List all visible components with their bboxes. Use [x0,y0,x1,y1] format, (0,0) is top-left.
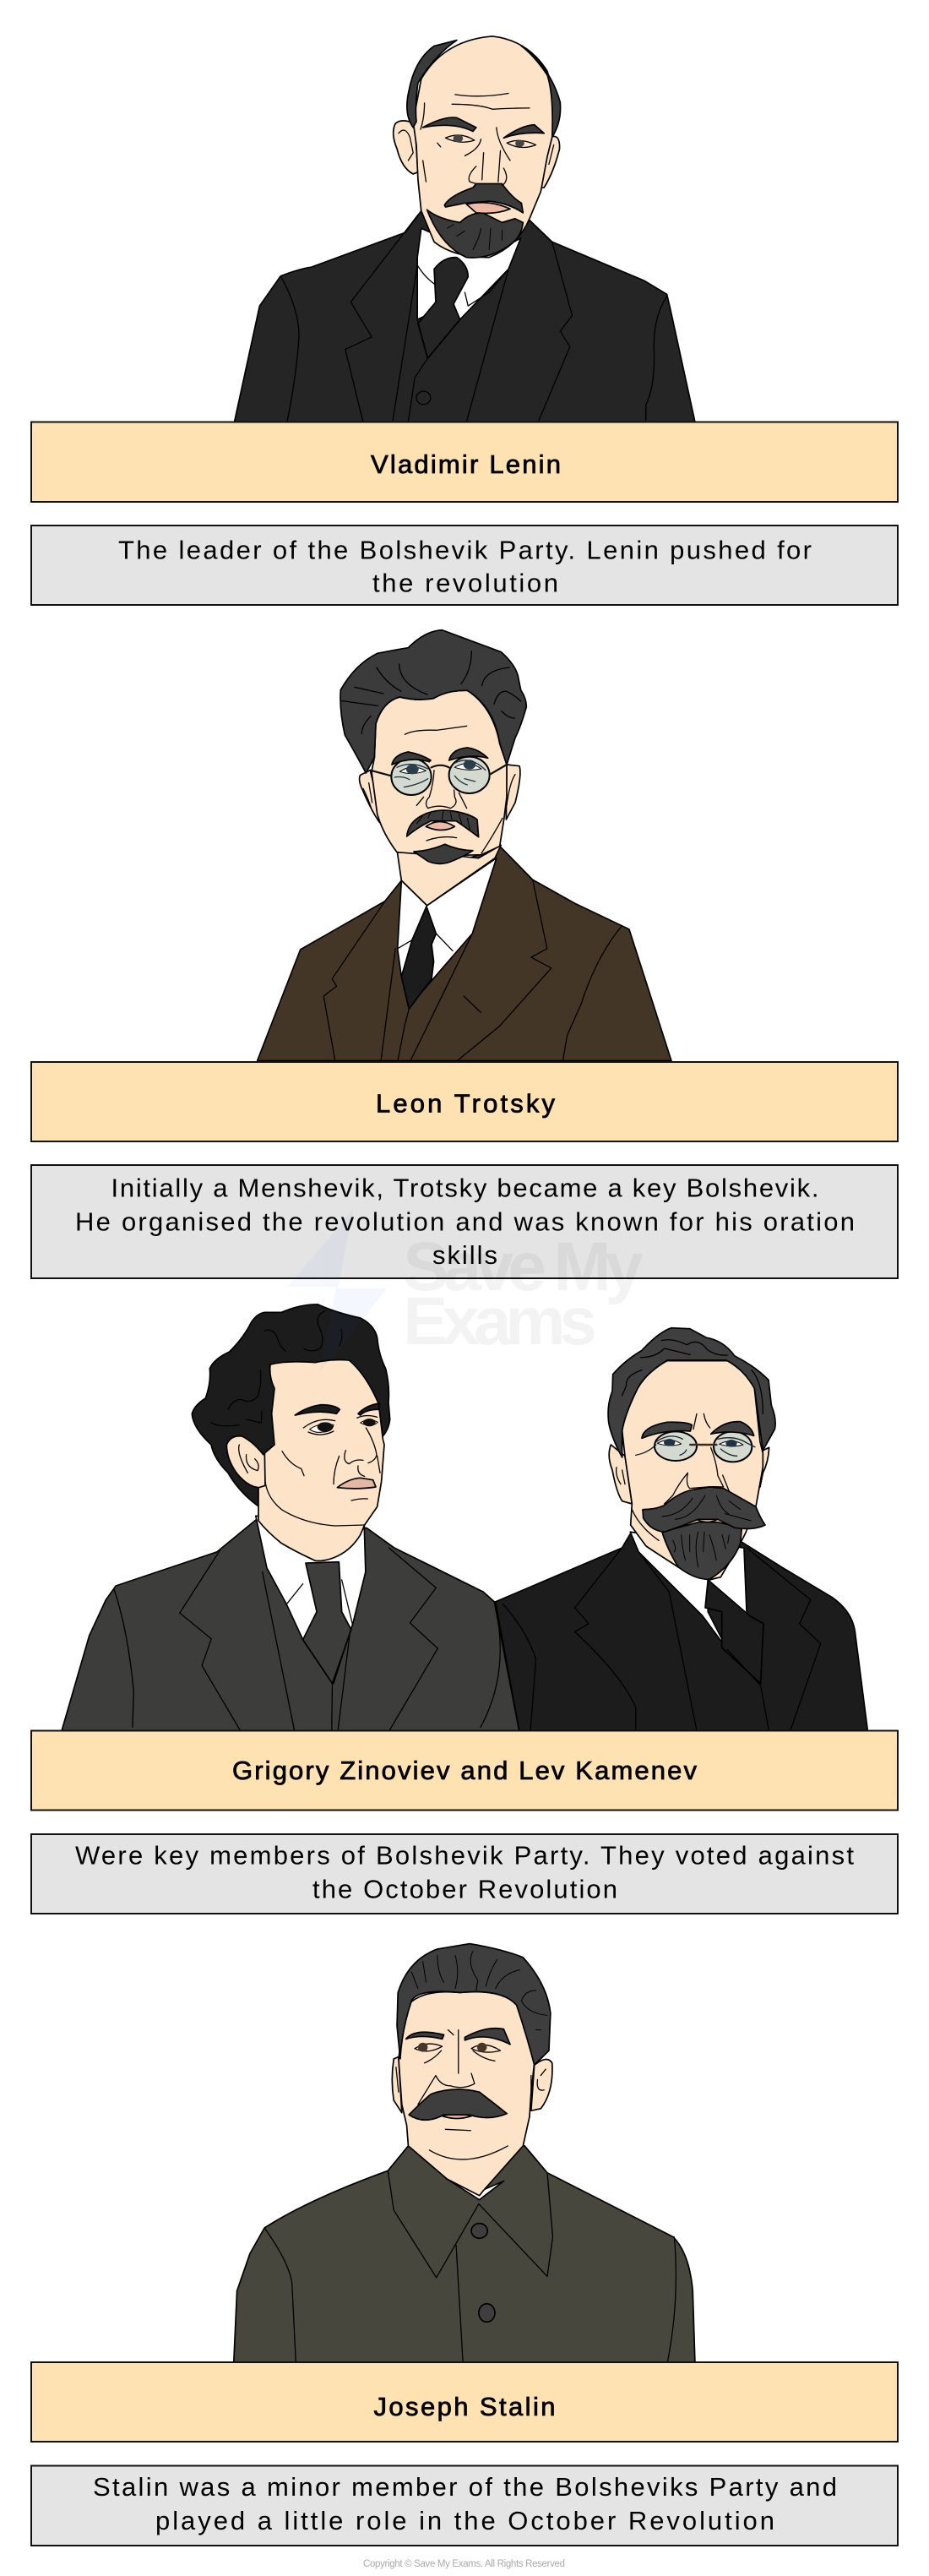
name bar: Vladimir Lenin [31,422,898,502]
name bar: Grigory Zinoviev and Lev Kamenev: Grigory Zinoviev and Lev Kamenev [232,1756,698,1785]
portrait: Grigory Zinoviev [62,1304,519,1731]
description: Trotsky: He organised the revolution and was known for his oration [75,1206,855,1237]
copyright line: Copyright © Save My Exams. All Rights Reserved [363,2559,565,2569]
portrait: Joseph Stalin [234,1944,695,2362]
Zinoviev head [192,1304,390,1560]
description: Trotsky [31,1165,898,1278]
description: Stalin: Stalin was a minor member of the Bolsheviks Party and [93,2472,837,2502]
name bar: Grigory Zinoviev and Lev Kamenev [31,1730,898,1810]
description: Zinoviev and Kamenev: the October Revolution [312,1875,617,1904]
description: Lenin: the revolution [372,568,558,598]
description: Trotsky: skills [432,1240,497,1270]
description: Stalin: played a little role in the October Revolution [155,2506,774,2535]
name bar: Vladimir Lenin: Vladimir Lenin [371,449,561,479]
description: Lenin [31,526,898,605]
watermark: Save My Exams: Exams [403,1283,597,1359]
Kamenev head [608,1328,775,1580]
Zinoviev jacket and shirt [62,1516,519,1731]
name bar: Leon Trotsky [31,1062,898,1141]
watermark: Save My Exams [287,1210,644,1373]
name bar: Joseph Stalin [31,2362,898,2442]
Trotsky jacket and shirt [258,845,671,1061]
description: Zinoviev and Kamenev: Were key members of Bolshevik Party. They voted against [75,1841,854,1871]
description: Stalin [31,2465,898,2546]
portrait: Leon Trotsky [258,630,671,1061]
portrait: Vladimir Lenin [235,36,695,422]
Kamenev jacket and shirt [496,1532,867,1731]
watermark: Save My Exams: Save My [403,1228,644,1305]
name bar: Leon Trotsky: Leon Trotsky [376,1088,556,1119]
Trotsky head [340,630,526,863]
description: Lenin: The leader of the Bolshevik Party. Lenin pushed for [118,536,812,564]
name bar: Joseph Stalin: Joseph Stalin [373,2392,556,2421]
portrait: Lev Kamenev [496,1328,867,1731]
description: Trotsky: Initially a Menshevik, Trotsky became a key Bolshevik. [111,1173,818,1203]
description: Zinoviev and Kamenev [31,1834,898,1914]
